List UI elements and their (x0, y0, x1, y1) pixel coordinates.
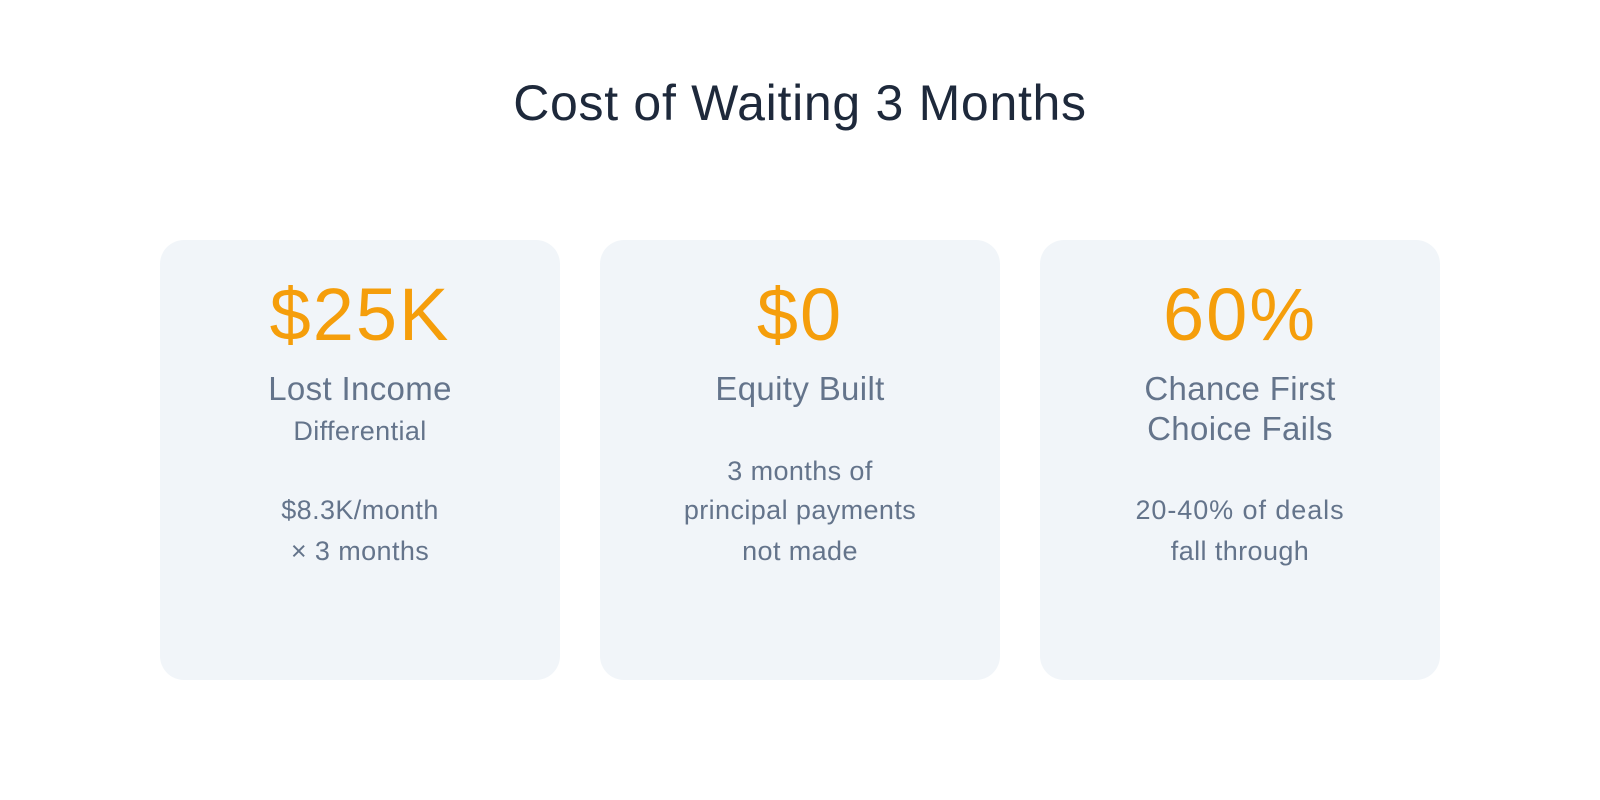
detail line 1: 20-40% of deals (1135, 495, 1345, 525)
title: Cost of Waiting 3 Months (513, 75, 1087, 131)
label: Equity Built (715, 370, 885, 407)
label: Lost Income (268, 370, 452, 407)
detail line 1: $8.3K/month (281, 495, 439, 525)
panel: lost income (160, 240, 560, 680)
stat value: $25K (270, 273, 450, 356)
stat value: $0 (757, 273, 843, 356)
detail line 3: not made (742, 536, 858, 566)
sublabel: Differential (293, 416, 427, 446)
detail line 2: principal payments (684, 495, 916, 525)
detail line 1: 3 months of (727, 456, 873, 486)
label line 1: Chance First (1144, 370, 1336, 407)
panel: chance first choice fails (1040, 240, 1440, 680)
detail line 2: fall through (1171, 536, 1309, 566)
panel: equity built (600, 240, 1000, 680)
detail line 2: × 3 months (291, 536, 429, 566)
stat value: 60% (1163, 273, 1317, 356)
label line 2: Choice Fails (1147, 410, 1333, 447)
